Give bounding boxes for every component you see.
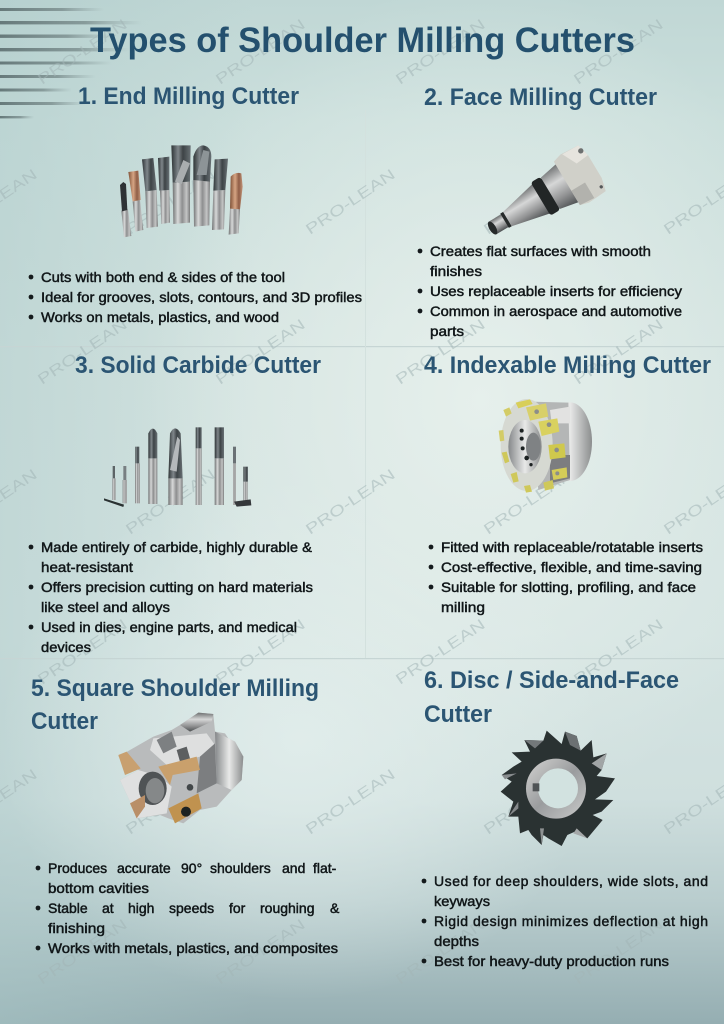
icon: indexable cutter with yellow inserts xyxy=(499,399,592,493)
text block: solid carbide bullets: like steel and alloys xyxy=(41,599,170,615)
text block: square shoulder bullets: finishing xyxy=(48,920,105,936)
icon: toothed side-and-face disc cutter xyxy=(501,731,615,846)
text block: face milling bullets: Creates flat surfaces with smooth xyxy=(430,243,651,259)
text block: face milling bullets: Uses replaceable inserts for efficiency xyxy=(430,283,682,299)
text block: disc cutter bullets: depths xyxy=(434,933,479,949)
text block: disc cutter bullets: Best for heavy-duty production runs xyxy=(434,953,669,969)
text block: square shoulder bullets: for xyxy=(229,900,246,916)
text block: disc cutter bullets: Rigid design minimizes deflection at high xyxy=(434,913,708,929)
text block: indexable bullets: Fitted with replaceable/rotatable inserts xyxy=(441,539,703,555)
title: Types of Shoulder Milling Cutters xyxy=(90,21,635,60)
heading: square shoulder milling cutter: Cutter xyxy=(31,708,98,735)
PRO-LEAN watermarks: PRO-LEAN xyxy=(123,766,218,838)
text block: square shoulder bullets: accurate xyxy=(117,860,171,876)
text block: square shoulder bullets: speeds xyxy=(169,900,214,916)
text block: indexable bullets xyxy=(429,539,703,615)
text block: square shoulder bullets: high xyxy=(128,900,154,916)
text block: disc cutter bullets: Used for deep shoulders, wide slots, and xyxy=(434,873,708,889)
heading: disc side-and-face cutter: 6. Disc / Side-and-Face xyxy=(424,667,679,694)
text block: end milling bullets: Works on metals, plastics, and wood xyxy=(41,309,279,325)
heading: disc side-and-face cutter xyxy=(424,667,679,728)
text block: solid carbide bullets: Made entirely of carbide, highly durable & xyxy=(41,539,313,555)
PRO-LEAN watermarks: PRO-LEAN xyxy=(393,16,488,88)
text block: indexable bullets: Suitable for slotting, profiling, and face xyxy=(441,579,696,595)
text block: square shoulder bullets xyxy=(36,860,340,956)
PRO-LEAN watermarks: PRO-LEAN xyxy=(481,166,576,238)
PRO-LEAN watermarks: PRO-LEAN xyxy=(213,616,308,688)
text block: square shoulder bullets: Works with metals, plastics, and composites xyxy=(48,940,338,956)
text block: indexable bullets: milling xyxy=(441,599,485,615)
PRO-LEAN watermarks: PRO-LEAN xyxy=(393,616,488,688)
text block: solid carbide bullets xyxy=(29,539,313,655)
text block: square shoulder bullets: and xyxy=(282,860,305,876)
PRO-LEAN watermarks: PRO-LEAN xyxy=(303,766,398,838)
PRO-LEAN watermarks: PRO-LEAN xyxy=(303,166,398,238)
text block: square shoulder bullets: & xyxy=(330,900,340,916)
PRO-LEAN watermarks: PRO-LEAN xyxy=(213,916,308,988)
panel: disc side-and-face cutter xyxy=(422,667,708,969)
text block: solid carbide bullets: Offers precision cutting on hard materials xyxy=(41,579,313,595)
PRO-LEAN watermarks: PRO-LEAN xyxy=(123,466,218,538)
PRO-LEAN watermarks: PRO-LEAN xyxy=(35,916,130,988)
PRO-LEAN watermarks: PRO-LEAN xyxy=(213,316,308,388)
text block: face milling bullets: Common in aerospace and automotive xyxy=(430,303,682,319)
PRO-LEAN watermarks: PRO-LEAN xyxy=(35,316,130,388)
panel: indexable milling cutter xyxy=(424,352,711,615)
PRO-LEAN watermarks: PRO-LEAN xyxy=(481,466,576,538)
heading: face milling cutter: 2. Face Milling Cutter xyxy=(424,84,657,111)
text block: solid carbide bullets: devices xyxy=(41,639,91,655)
text block: disc cutter bullets: keyways xyxy=(434,893,490,909)
heading: square shoulder milling cutter: 5. Square Shoulder Milling xyxy=(31,675,319,702)
icon: face mill on tapered holder xyxy=(475,143,609,254)
icon: set of end mills xyxy=(120,145,243,237)
PRO-LEAN watermarks: PRO-LEAN xyxy=(303,466,398,538)
heading: disc side-and-face cutter: Cutter xyxy=(424,701,492,728)
PRO-LEAN watermarks: PRO-LEAN xyxy=(393,316,488,388)
text block: solid carbide bullets: Used in dies, engine parts, and medical xyxy=(41,619,297,635)
text block: square shoulder bullets: roughing xyxy=(260,900,314,916)
panel: face milling cutter xyxy=(418,84,682,339)
PRO-LEAN watermarks: PRO-LEAN xyxy=(213,16,308,88)
text block: end milling bullets: Ideal for grooves, slots, contours, and 3D profiles xyxy=(41,289,362,305)
PRO-LEAN watermarks: PRO-LEAN xyxy=(35,616,130,688)
text block: square shoulder bullets: flat- xyxy=(313,860,337,876)
icon: row of solid carbide cutters xyxy=(104,427,251,507)
PRO-LEAN watermarks: PRO-LEAN xyxy=(35,16,130,88)
decorative speed streaks xyxy=(0,8,142,118)
text block: square shoulder bullets: Stable xyxy=(48,900,88,916)
heading: square shoulder milling cutter xyxy=(31,675,319,735)
text block: disc cutter bullets xyxy=(422,873,708,969)
text block: face milling bullets: finishes xyxy=(430,263,482,279)
PRO-LEAN watermarks: PRO-LEAN xyxy=(571,316,666,388)
text block: solid carbide bullets: heat-resistant xyxy=(41,559,133,575)
PRO-LEAN watermarks: PRO-LEAN xyxy=(571,16,666,88)
text block: square shoulder bullets: at xyxy=(102,900,114,916)
text block: square shoulder bullets: Produces xyxy=(48,860,107,876)
PRO-LEAN watermarks: PRO-LEAN xyxy=(481,766,576,838)
heading: indexable milling cutter: 4. Indexable Milling Cutter xyxy=(424,352,711,379)
panel: square shoulder milling cutter xyxy=(31,675,340,956)
text block: face milling bullets: parts xyxy=(430,323,464,339)
panel: end milling cutter xyxy=(29,83,362,325)
text block: indexable bullets: Cost-effective, flexible, and time-saving xyxy=(441,559,702,575)
PRO-LEAN watermarks: PRO-LEAN xyxy=(571,616,666,688)
heading: solid carbide cutter: 3. Solid Carbide Cutter xyxy=(75,352,321,379)
text block: square shoulder bullets: bottom cavities xyxy=(48,880,149,896)
text block: end milling bullets: Cuts with both end & sides of the tool xyxy=(41,269,285,285)
text block: end milling bullets xyxy=(29,269,362,325)
PRO-LEAN watermarks: PRO-LEAN xyxy=(393,916,488,988)
panel: solid carbide cutter xyxy=(29,352,321,655)
icon: square shoulder cutter with copper inserts xyxy=(118,713,243,823)
text block: face milling bullets xyxy=(418,243,682,339)
text block: square shoulder bullets: shoulders xyxy=(210,860,271,876)
PRO-LEAN watermarks: PRO-LEAN xyxy=(571,916,666,988)
text block: square shoulder bullets: 90° xyxy=(181,860,202,876)
PRO-LEAN watermarks: PRO-LEAN xyxy=(123,166,218,238)
heading: end milling cutter: 1. End Milling Cutter xyxy=(78,83,299,110)
